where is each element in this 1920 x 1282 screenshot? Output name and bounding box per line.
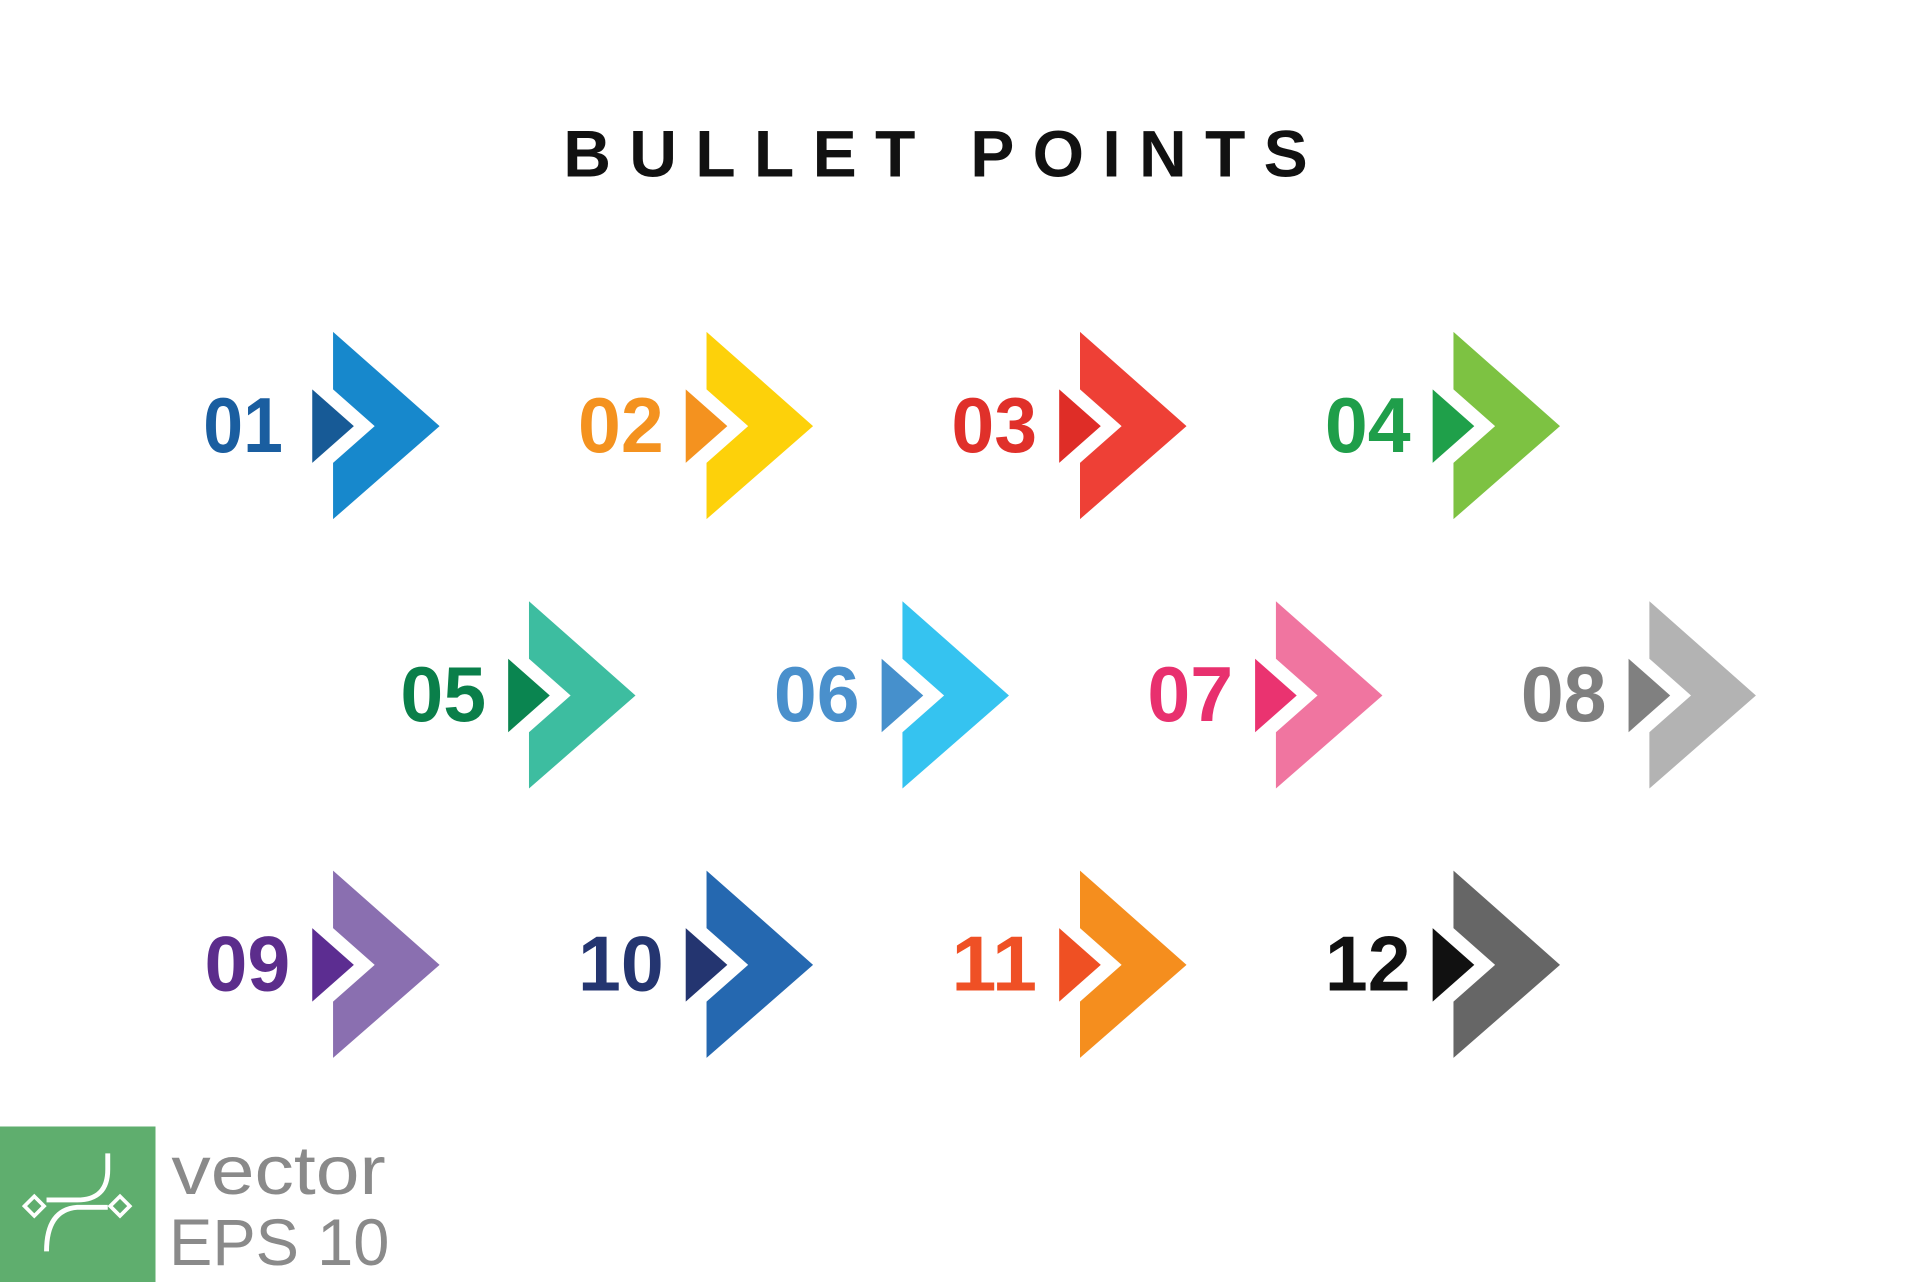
bullet 07 [1147,601,1382,789]
bullet 12 [1325,871,1560,1058]
bullet 08 [1521,601,1756,789]
bullet 04: 04 [1325,381,1411,469]
bullet 03 [951,332,1187,519]
bullet 09 [204,871,440,1058]
bullet 04 [1325,332,1560,519]
bullet 11: 11 [951,920,1037,1008]
bullet 01: 01 [203,381,283,469]
bullet 07: 07 [1147,650,1233,738]
bullet 05: 05 [400,650,486,738]
bullet 08: 08 [1521,650,1607,738]
bullet 03: 03 [951,381,1037,469]
bullet 11 [951,871,1187,1058]
bullet 10: 10 [578,920,664,1008]
watermark text: EPS 10 [169,1206,389,1280]
bullet 01 [203,332,440,519]
bullet 06 [774,601,1009,789]
bullet 09: 09 [204,920,290,1008]
bullet 12: 12 [1325,920,1411,1008]
bullet 06: 06 [774,650,860,738]
bullet 10 [578,871,813,1058]
bullet 02: 02 [578,381,664,469]
watermark text [169,1132,389,1280]
bullet 05 [400,601,636,789]
watermark text: vector [171,1132,386,1209]
bullet 02 [578,332,813,519]
watermark logo [0,1126,156,1282]
title: BULLET POINTS [563,117,1308,191]
